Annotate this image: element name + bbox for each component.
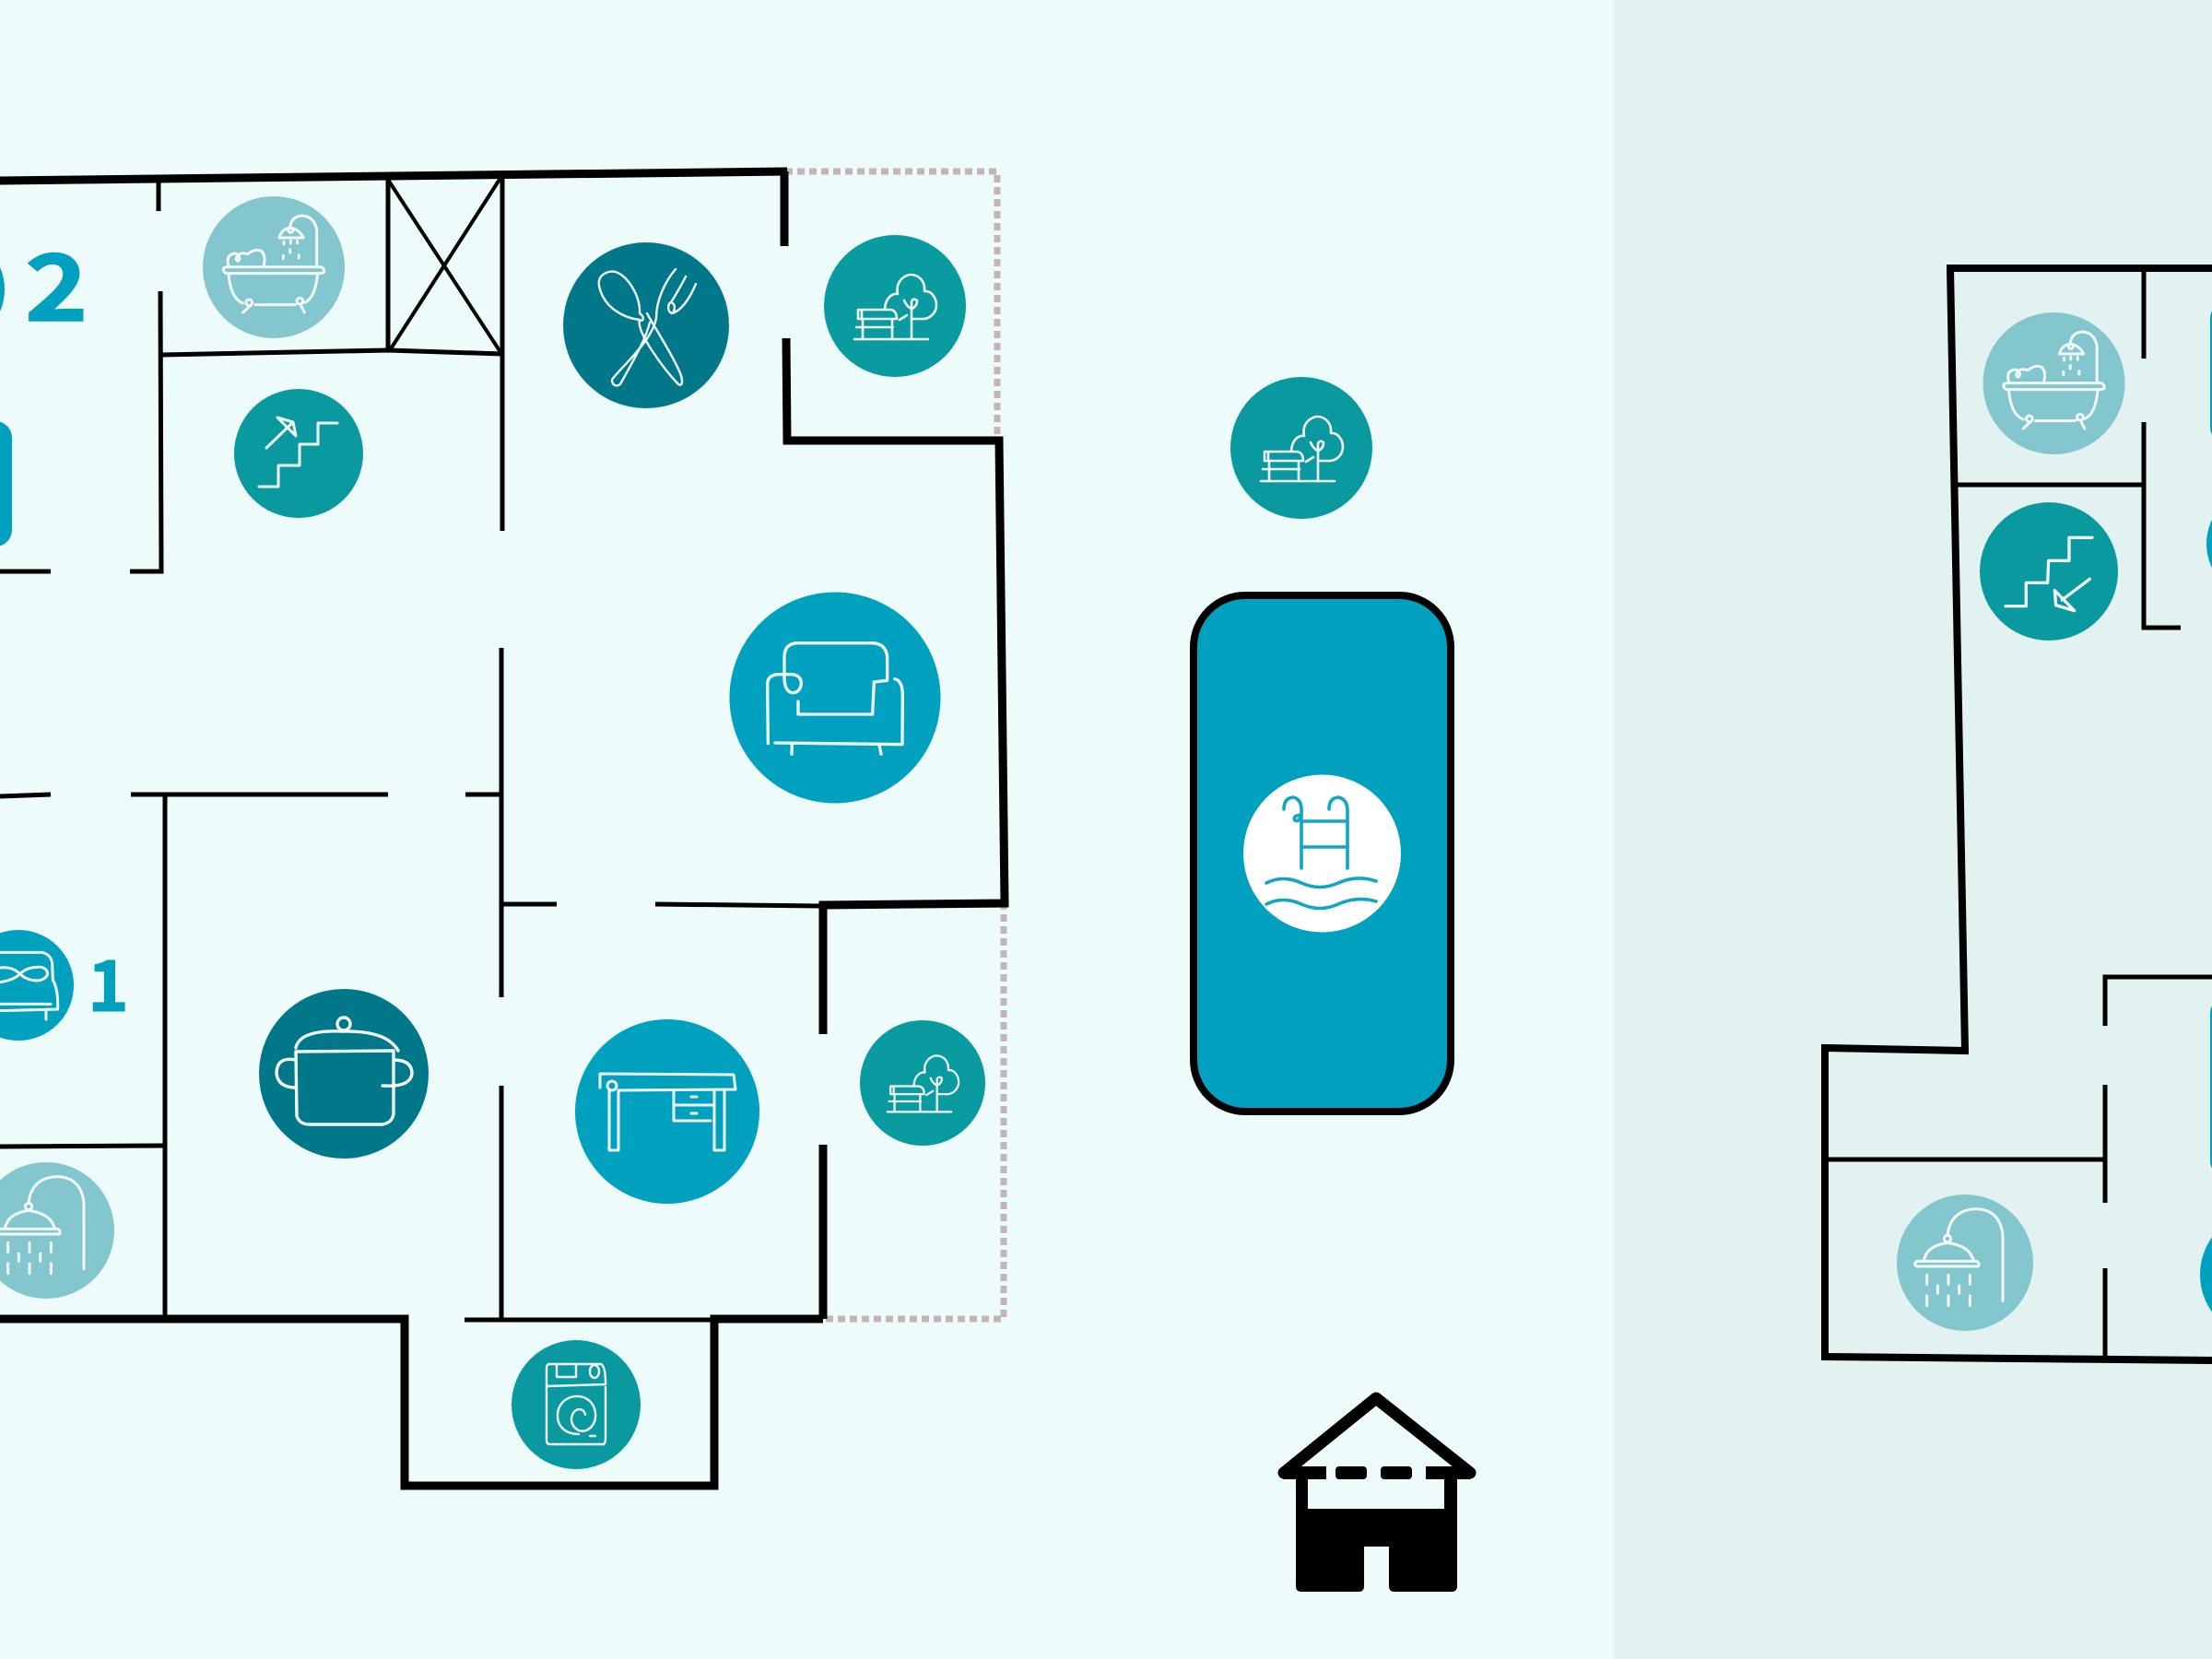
inner walls: [0, 173, 823, 1320]
icon: sofa: [730, 592, 940, 804]
label: floor number 2: 2: [25, 215, 88, 348]
icon: bed cropped: [0, 930, 74, 1041]
icon: stairs down: [1980, 502, 2118, 641]
floor plan: main house walls: [0, 171, 1005, 1486]
cropped rooms icons at right edge: [2200, 304, 2212, 1339]
elevator shaft cross: [388, 175, 502, 352]
icon: garden bench and tree, pool area: [1230, 377, 1372, 519]
icon: black house: [1283, 1398, 1470, 1592]
icon: stairs up: [234, 389, 363, 518]
icon: cooking pot: [259, 989, 429, 1159]
swimming pool: [1194, 595, 1451, 1112]
floor plan: right house walls: [1825, 268, 2212, 1360]
icon: bathtub, right plan: [1983, 312, 2125, 454]
outer walls: [1825, 268, 2212, 1360]
icon: garden bench and tree, top terrace: [824, 235, 966, 377]
label: floor number 1: 1: [88, 930, 129, 1031]
background: left panel: [0, 0, 1614, 1659]
icon: washing machine: [512, 1340, 641, 1469]
icon: bathtub, left plan: [203, 196, 345, 338]
icon: desk: [575, 1019, 759, 1204]
icon: cropped circle at left edge: [0, 234, 5, 345]
icon: spoon and fork dining: [563, 242, 729, 408]
terrace outline: dotted: [785, 171, 1004, 1319]
icon: pool ladder: [1243, 774, 1401, 933]
background: right panel: [1614, 0, 2212, 1659]
icon: garden bench and tree, lower terrace: [860, 1020, 985, 1146]
outer walls: [0, 171, 1005, 1486]
bed cropped at left edge: [0, 421, 12, 547]
inner walls: [1825, 268, 2212, 1358]
icon: shower, left plan: [0, 1162, 114, 1299]
icon: shower, right plan: [1897, 1194, 2033, 1331]
